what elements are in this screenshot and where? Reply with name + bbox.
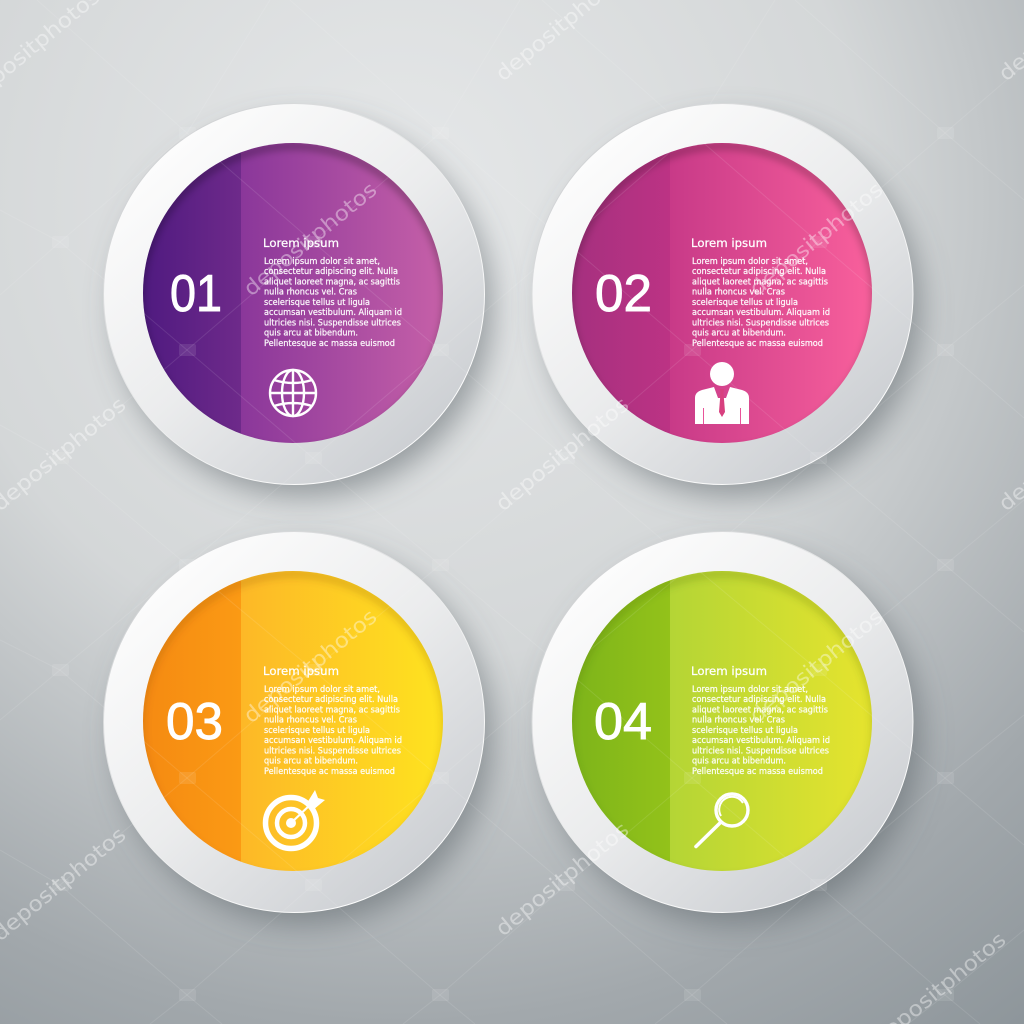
icon: target with arrow [266, 790, 325, 848]
ring [104, 532, 484, 912]
body text: scelerisque tellus ut ligula [264, 298, 370, 308]
ring shadow [116, 548, 492, 924]
heading: Lorem ipsum [691, 236, 767, 250]
colour disc [569, 571, 875, 880]
number: 01 [170, 265, 222, 323]
icon: globe [270, 370, 316, 416]
body text: Lorem ipsum dolor sit amet, [264, 257, 380, 267]
body text: nulla rhoncus vel. Cras [264, 288, 357, 298]
panel 04 [532, 532, 921, 924]
watermark logos: depositphotos [239, 604, 381, 728]
panel 02 [532, 104, 921, 496]
ring [532, 532, 913, 912]
body text: nulla rhoncus vel. Cras [692, 288, 785, 298]
body text [692, 257, 830, 349]
body text: aliquet laoreet magna, ac sagittis [692, 277, 828, 287]
body text: consectetur adipiscing elit. Nulla [692, 267, 826, 277]
body text: Lorem ipsum dolor sit amet, [692, 685, 808, 695]
body text: Lorem ipsum dolor sit amet, [264, 685, 380, 695]
body text [264, 685, 402, 777]
body text: scelerisque tellus ut ligula [692, 726, 798, 736]
watermark logos: depositphotos [745, 604, 887, 728]
body text: nulla rhoncus vel. Cras [692, 716, 785, 726]
body text: scelerisque tellus ut ligula [692, 298, 798, 308]
body text: quis arcu at bibendum. [692, 757, 786, 767]
body text: quis arcu at bibendum. [264, 329, 358, 339]
watermark logos: depositphotos [491, 392, 633, 516]
watermark logos: depositphotos [239, 177, 381, 301]
body text: aliquet laoreet magna, ac sagittis [264, 705, 400, 715]
watermark camera icons [52, 127, 954, 1001]
body text: accumsan vestibulum. Aliquam id [692, 308, 830, 318]
body text: consectetur adipiscing elit. Nulla [264, 695, 398, 705]
number: 04 [594, 693, 652, 751]
body text: ultricies nisi. Suspendisse ultrices [692, 746, 829, 756]
ring shadow [116, 120, 492, 496]
ring [104, 104, 484, 484]
body text: accumsan vestibulum. Aliquam id [264, 736, 402, 746]
body text: quis arcu at bibendum. [692, 329, 786, 339]
colour disc [569, 143, 875, 452]
panel 01 [104, 104, 492, 496]
body text: aliquet laoreet magna, ac sagittis [692, 705, 828, 715]
heading: Lorem ipsum [263, 664, 339, 678]
ring shadow [545, 120, 921, 496]
colour disc [140, 143, 446, 452]
heading: Lorem ipsum [691, 664, 767, 678]
icon: businessman [695, 362, 749, 424]
body text: ultricies nisi. Suspendisse ultrices [692, 318, 829, 328]
ring shadow [545, 548, 921, 924]
panel 03 [104, 532, 492, 924]
body text: quis arcu at bibendum. [264, 757, 358, 767]
body text: aliquet laoreet magna, ac sagittis [264, 277, 400, 287]
body text: Pellentesque ac massa euismod [264, 767, 395, 777]
body text: ultricies nisi. Suspendisse ultrices [264, 318, 401, 328]
body text: Pellentesque ac massa euismod [692, 767, 823, 777]
body text: accumsan vestibulum. Aliquam id [264, 308, 402, 318]
colour disc [140, 571, 446, 880]
number: 02 [595, 265, 652, 323]
body text: consectetur adipiscing elit. Nulla [264, 267, 398, 277]
body text: nulla rhoncus vel. Cras [264, 716, 357, 726]
ring [532, 104, 913, 484]
body text: Pellentesque ac massa euismod [692, 339, 823, 349]
body text: accumsan vestibulum. Aliquam id [692, 736, 830, 746]
watermark logos: depositphotos [745, 177, 887, 301]
body text [264, 257, 402, 349]
watermark logos: depositphotos [491, 817, 633, 941]
body text: Lorem ipsum dolor sit amet, [692, 257, 808, 267]
heading: Lorem ipsum [263, 236, 339, 250]
body text [692, 685, 830, 777]
number: 03 [166, 693, 223, 751]
body text: Pellentesque ac massa euismod [264, 339, 395, 349]
icon: magnifying glass [696, 794, 748, 846]
body text: consectetur adipiscing elit. Nulla [692, 695, 826, 705]
body text: scelerisque tellus ut ligula [264, 726, 370, 736]
body text: ultricies nisi. Suspendisse ultrices [264, 746, 401, 756]
